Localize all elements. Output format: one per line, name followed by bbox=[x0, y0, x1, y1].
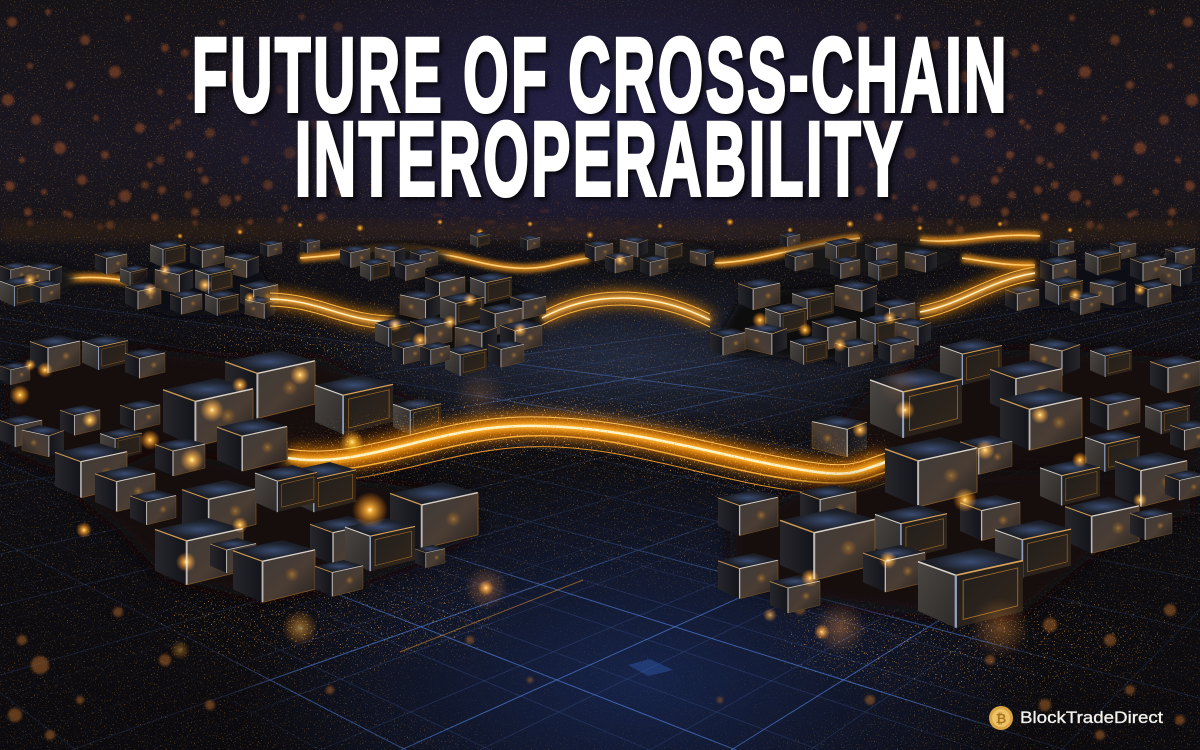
logo: BlockTradeDirect bbox=[989, 706, 1163, 730]
upper-left block cluster bbox=[125, 240, 278, 319]
left foreground block pile bbox=[55, 378, 480, 602]
icon: gold coin: ₿ bbox=[996, 712, 1006, 727]
left foreground stream bbox=[20, 387, 165, 422]
back blocks of left foreground pile bbox=[0, 335, 441, 475]
back blocks of right foreground pile bbox=[812, 338, 1200, 470]
brand name: BlockTradeDirect bbox=[1020, 709, 1163, 727]
centre block cluster bbox=[375, 272, 546, 376]
glowing light points bbox=[10, 254, 1147, 660]
foreground stream core bbox=[286, 417, 886, 494]
upper-right block cluster bbox=[1005, 248, 1192, 315]
distant horizon lights bbox=[0, 218, 1200, 242]
far block clusters bbox=[0, 232, 1195, 306]
mid glowing data streams bbox=[270, 267, 1035, 329]
stream sparkle dust bbox=[278, 397, 903, 502]
sky bokeh particles bbox=[0, 0, 1200, 235]
title bbox=[192, 17, 1009, 218]
floor bokeh bbox=[8, 604, 1185, 740]
far glowing data streams bbox=[0, 235, 1040, 290]
floor grid bbox=[0, 215, 1200, 750]
centre-right block cluster bbox=[710, 278, 931, 367]
floor sparkle particles bbox=[0, 235, 1200, 750]
floor accent lines bbox=[400, 580, 673, 676]
icon: gold coin bbox=[989, 706, 1013, 730]
right foreground block pile bbox=[718, 430, 1200, 628]
